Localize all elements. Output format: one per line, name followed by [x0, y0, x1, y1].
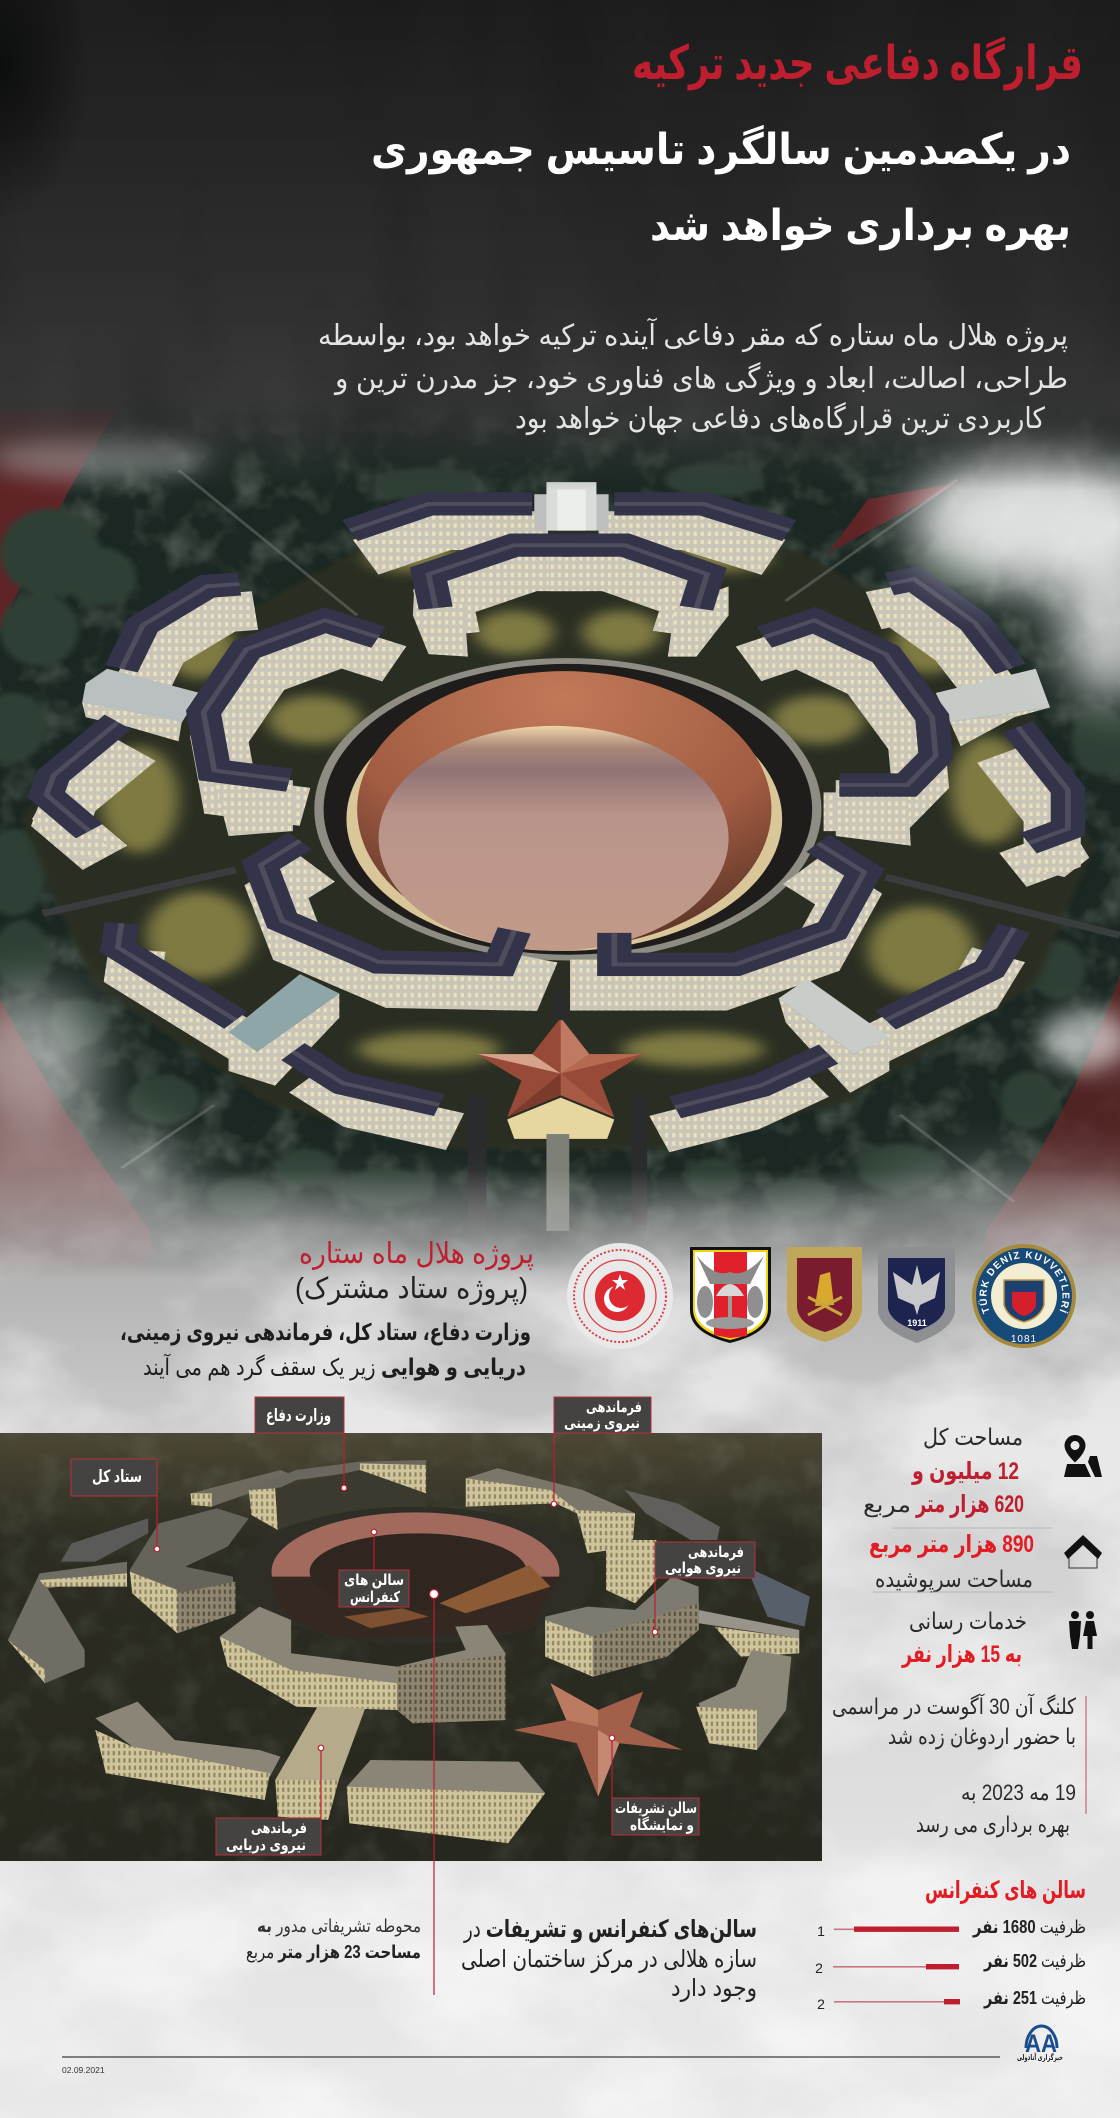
- intro paragraph: پروژه هلال ماه ستاره که مقر دفاعی آینده ترکیه خواهد بود، بواسطه: [318, 317, 1068, 353]
- chart row 1680: 1: [817, 1923, 825, 1939]
- tree clumps: [0, 463, 1120, 1216]
- label: naval forces command: [216, 1818, 321, 1855]
- emblem: ministry of defence: [567, 1243, 673, 1349]
- label: land forces command: [554, 1397, 651, 1433]
- central conference ring: [314, 658, 821, 961]
- label: air force command: فرماندهی: [688, 1544, 744, 1561]
- label: ministry of defence: وزارت دفاع: [266, 1406, 331, 1426]
- site ground: [21, 528, 1093, 1149]
- label: naval forces command: فرماندهی: [251, 1820, 307, 1837]
- title: بهره برداری خواهد شد: [650, 202, 1071, 251]
- 3D building photo panel: [0, 1433, 822, 1861]
- label: conference halls: کنفرانس: [350, 1589, 400, 1606]
- intro paragraph: کاربردی ترین قرارگاه‌های دفاعی جهان خواهد بود: [515, 402, 1045, 435]
- chart row 251: 2: [817, 1996, 825, 2012]
- dark red crescent shapes: [0, 407, 1120, 1294]
- project heading: پروژه هلال ماه ستاره: [299, 1238, 534, 1271]
- label: general staff: [71, 1459, 157, 1496]
- title: [371, 36, 1083, 251]
- project heading: (پروژه ستاد مشترک): [295, 1273, 528, 1306]
- background: light clouds lower section: [0, 1170, 1120, 2118]
- emblem: general staff: [690, 1247, 771, 1343]
- label: naval forces command: نیروی دریایی: [226, 1837, 306, 1854]
- label: ministry of defence: [255, 1397, 344, 1433]
- front wing: [220, 1607, 505, 1723]
- label: land forces command: فرماندهی: [586, 1399, 642, 1416]
- label: conference halls: سالن های: [344, 1572, 404, 1589]
- stat: covered area: [869, 1528, 1052, 1593]
- centre caption: [461, 1916, 757, 2002]
- project heading: وزارت دفاع، ستاد کل، فرماندهی نیروی زمینی،: [120, 1319, 531, 1346]
- left wings: [130, 1508, 249, 1633]
- icon: location map: [1064, 1435, 1102, 1477]
- left caption: [246, 1916, 421, 1963]
- stat: service capacity: به 15 هزار نفر: [901, 1641, 1022, 1668]
- project heading: [120, 1238, 534, 1381]
- chart row 251: [817, 1988, 1086, 2012]
- footer rule: [62, 2056, 1000, 2058]
- chart row 502: ظرفیت 502 نفر: [983, 1951, 1086, 1972]
- intro paragraph: [318, 317, 1068, 435]
- logo: Anadolu Agency: خبرگزاری آنادولی: [1017, 2052, 1063, 2062]
- icon: people: [1069, 1611, 1097, 1649]
- road walkway ends: [43, 870, 1120, 935]
- emblem: naval forces: [972, 1244, 1076, 1348]
- conference halls bar chart: [815, 1877, 1086, 2012]
- dates note: کلنگ آن 30 آگوست در مراسمی: [832, 1693, 1076, 1719]
- icon: covered roof: [1064, 1535, 1102, 1568]
- left caption: محوطه تشریفاتی مدور به: [257, 1916, 421, 1937]
- rear buildings: [191, 1470, 296, 1507]
- stat: total area: 12 میلیون و: [911, 1458, 1019, 1485]
- stat: total area: [863, 1424, 1024, 1518]
- dates note: بهره برداری می رسد: [916, 1812, 1070, 1837]
- label: ceremony and exhibition hall: و نمایشگاه: [630, 1816, 694, 1834]
- chart row 251: ظرفیت 251 نفر: [983, 1988, 1086, 2009]
- main illustration: aerial view of the headquarters: [0, 400, 1120, 1300]
- background: dark smoky sky: [0, 0, 1120, 500]
- logo: Anadolu Agency: AA: [1025, 2030, 1057, 2058]
- emblem: air force: 1911: [907, 1318, 927, 1328]
- intro paragraph: طراحی، اصالت، ابعاد و ویژگی های فناوری خود، جز مدرن ترین و: [333, 362, 1068, 395]
- mist over the scene edges: [0, 433, 1120, 1240]
- chart row 1680: ظرفیت 1680 نفر: [972, 1917, 1086, 1938]
- label: ceremony and exhibition hall: [612, 1798, 699, 1835]
- light roof connector blocks: [82, 482, 1050, 1093]
- stat: total area: مربع: [863, 1492, 911, 1517]
- stat: covered area: 890 هزار متر مربع: [869, 1531, 1034, 1558]
- stat: total area: 620 هزار متر: [915, 1491, 1024, 1518]
- label: air force command: [655, 1542, 755, 1578]
- central conference hall ring: [244, 1506, 573, 1638]
- stat: total area: مساحت کل: [923, 1424, 1023, 1450]
- dark roofs: [46, 504, 1068, 1107]
- emblem: naval forces: 1081: [1011, 1334, 1037, 1345]
- stat: covered area: مساحت سرپوشیده: [875, 1566, 1033, 1593]
- centre caption: سازه هلالی در مرکز ساختمان اصلی: [461, 1946, 757, 1973]
- stat: service capacity: [901, 1608, 1027, 1668]
- near wings: [95, 1702, 281, 1777]
- logo: Anadolu Agency: [1017, 2026, 1063, 2062]
- building facades: [62, 531, 1052, 1134]
- label: conference halls: [339, 1570, 409, 1607]
- emblem: air force: [878, 1247, 955, 1343]
- lit gardens: [100, 543, 1029, 1066]
- label: air force command: نیروی هوایی: [665, 1560, 741, 1577]
- stat: service capacity: خدمات رسانی: [909, 1608, 1027, 1635]
- label: land forces command: نیروی زمینی: [564, 1415, 640, 1432]
- dates note: [832, 1693, 1086, 1837]
- emblem: naval forces: TÜRK DENİZ KUVVETLERİ: [978, 1251, 1070, 1314]
- callout lines and dots: [154, 1433, 658, 1995]
- date: 02.09.2021: [62, 2065, 105, 2075]
- label: ceremony and exhibition hall: سالن تشریفات: [615, 1800, 697, 1817]
- chart row 502: [815, 1951, 1086, 1976]
- chart row 502: 2: [815, 1960, 823, 1976]
- emblem: land forces: [787, 1247, 862, 1342]
- centre caption: سالن‌های کنفرانس و تشریفات در: [463, 1916, 757, 1943]
- star pavilion: [477, 1018, 643, 1139]
- left caption: مساحت 23 هزار متر مربع: [246, 1942, 421, 1963]
- project heading: دریایی و هوایی زیر یک سقف گرد هم می آیند: [143, 1353, 526, 1381]
- dates note: با حضور اردوغان زده شد: [888, 1724, 1076, 1749]
- star roof: [513, 1683, 683, 1797]
- label: general staff: ستاد کل: [92, 1467, 142, 1486]
- entrance pavilions: [32, 586, 1089, 877]
- chart row 1680: [817, 1917, 1086, 1939]
- dates note: 19 مه 2023 به: [961, 1780, 1076, 1805]
- right wings: [606, 1540, 656, 1603]
- title: در یکصدمین سالگرد تاسیس جمهوری: [371, 124, 1071, 175]
- centre caption: وجود دارد: [671, 1975, 757, 2002]
